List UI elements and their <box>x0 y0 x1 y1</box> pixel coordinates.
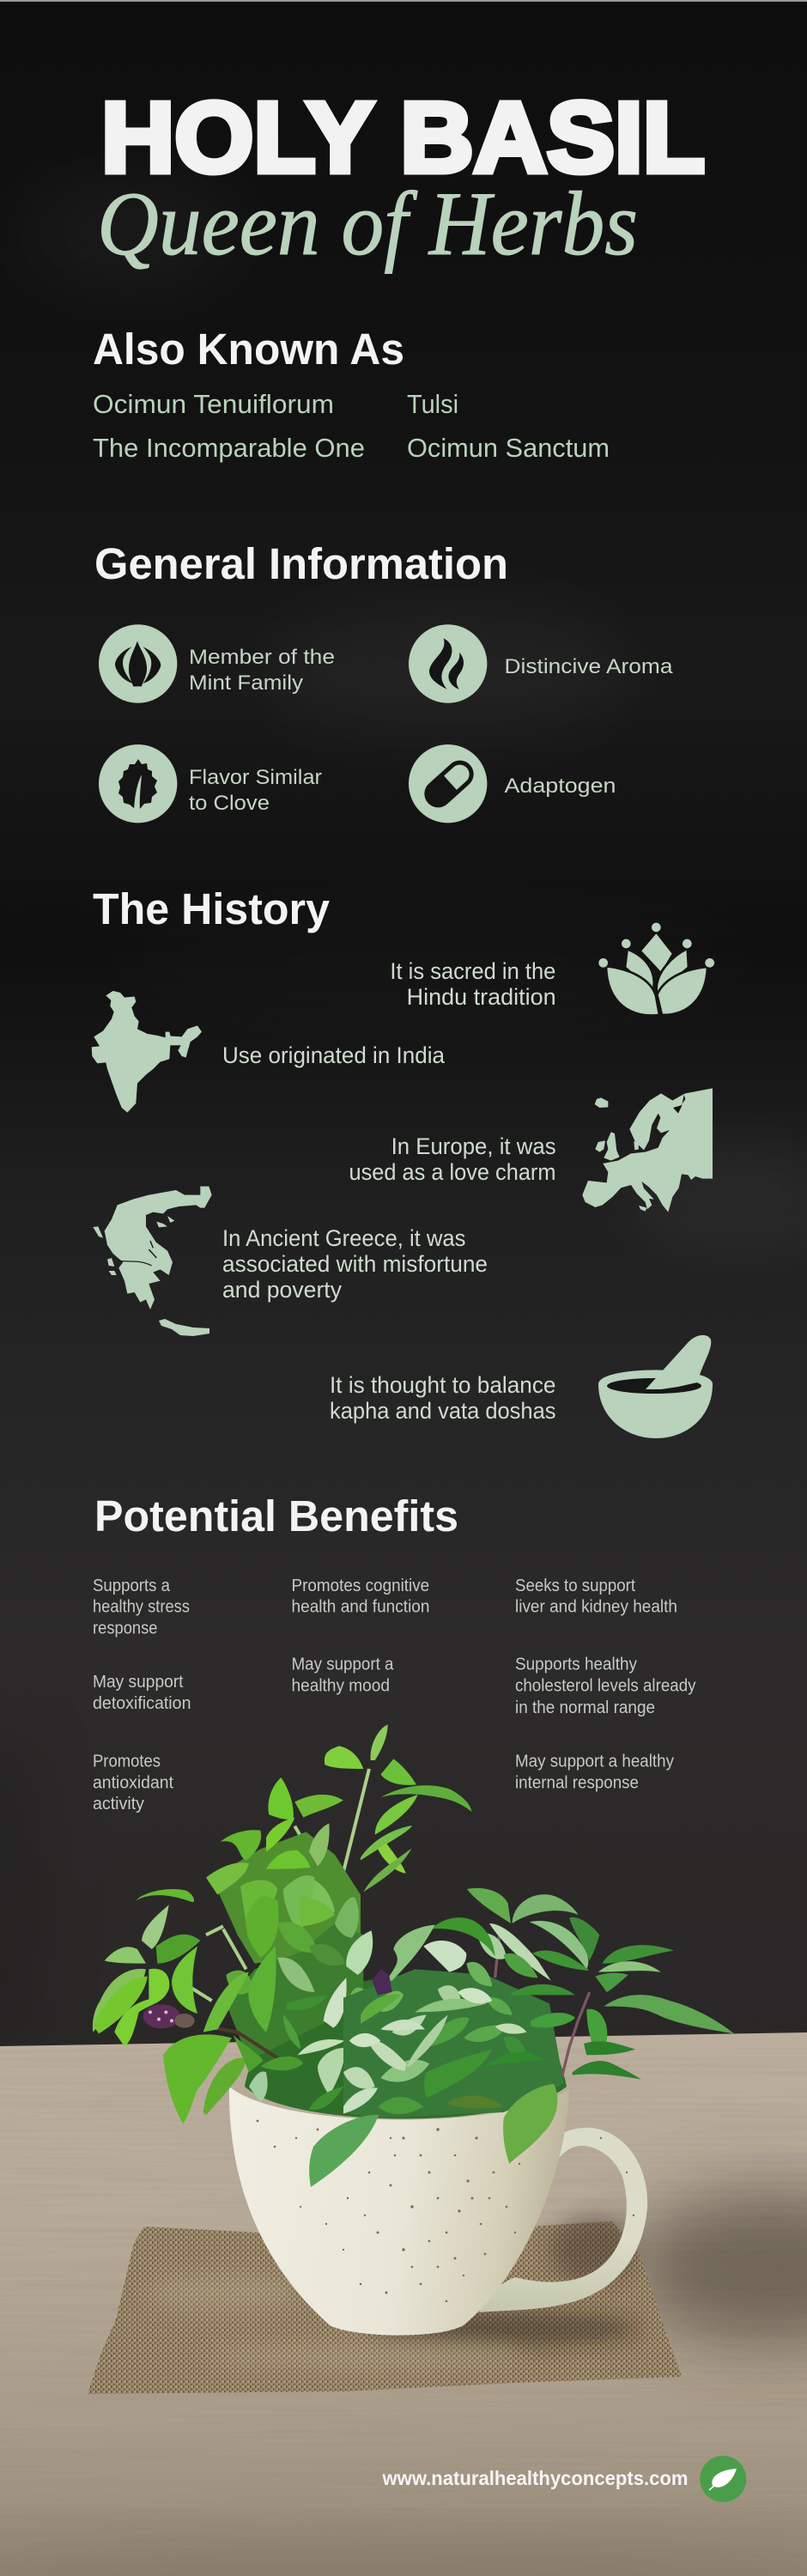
benefit: cholesterol: in the normal range <box>515 1698 655 1717</box>
benefit: liver and kidney: Seeks to support <box>515 1576 635 1595</box>
benefit: cholesterol <box>515 1654 696 1717</box>
title block <box>97 82 705 274</box>
title: Holy Basil: HOLY BASIL <box>101 82 705 193</box>
benefit: liver and kidney: liver and kidney health <box>515 1597 677 1616</box>
text: ancient greece: In Ancient Greece, it was <box>222 1225 465 1251</box>
benefit: healthy mood <box>292 1654 394 1695</box>
benefit: healthy mood: healthy mood <box>292 1676 390 1695</box>
text: use originated in india: Use originated in India <box>222 1042 445 1068</box>
benefit: stress response: response <box>93 1618 158 1638</box>
benefit: stress response: Supports a <box>93 1576 171 1595</box>
website url: www.naturalhealthyconcepts.com <box>382 2467 689 2489</box>
footer <box>382 2456 746 2502</box>
list of alternate names: Tulsi <box>407 389 458 419</box>
benefit: liver and kidney <box>515 1576 677 1616</box>
benefit: stress response: healthy stress <box>93 1597 190 1616</box>
left sprig <box>93 1724 471 2123</box>
benefit: antioxidant activity: Promotes <box>93 1752 161 1771</box>
cup <box>229 2087 647 2336</box>
benefit: internal response: May support a healthy <box>515 1752 675 1771</box>
list of alternate names <box>93 389 610 463</box>
chalkboard background <box>0 0 807 2061</box>
panel: potential benefits <box>93 1492 696 1814</box>
text: member of the mint family <box>189 646 335 695</box>
list of alternate names: The Incomparable One <box>93 433 365 463</box>
cup body <box>229 2087 569 2336</box>
text: ancient greece <box>222 1225 488 1303</box>
benefit: antioxidant activity: antioxidant <box>93 1772 173 1793</box>
benefit: cholesterol: Supports healthy <box>515 1654 638 1674</box>
benefit: cognitive health: health and function <box>292 1597 429 1616</box>
burlap mat <box>88 2215 682 2394</box>
island of crete <box>159 1319 209 1336</box>
icon: aroma flame <box>409 624 487 703</box>
benefit: stress response <box>93 1576 190 1638</box>
icon: green leaf logo <box>700 2456 746 2502</box>
hanging leaf on cup, left <box>309 2115 379 2187</box>
text: ancient greece: and poverty <box>222 1277 343 1303</box>
benefit: antioxidant activity <box>93 1752 173 1814</box>
text: ancient greece: associated with misfortune <box>222 1251 488 1277</box>
benefit: healthy mood: May support a <box>292 1654 394 1674</box>
list of alternate names: Ocimun Sanctum <box>407 433 610 463</box>
text: flavor similar to clove: to Clove <box>189 792 270 815</box>
benefit: internal response: internal response <box>515 1772 639 1793</box>
heading: also known as: Also Known As <box>93 325 404 374</box>
text: sacred in hindu tradition: It is sacred in the <box>390 958 555 984</box>
text: love charm in europe: In Europe, it was <box>391 1133 556 1159</box>
icon: lotus <box>598 923 714 1016</box>
plant: tulsi leaves <box>93 1724 734 2187</box>
plant background foliage <box>245 1974 567 2119</box>
benefit: detoxification: detoxification <box>93 1693 191 1713</box>
text: member of the mint family: Member of the <box>189 646 335 669</box>
flower <box>143 2004 195 2028</box>
panel: also known as <box>93 325 610 463</box>
text: balance doshas: It is thought to balance <box>330 1372 556 1398</box>
benefit: cholesterol: cholesterol levels already <box>515 1676 696 1695</box>
icon: mint bud <box>99 624 177 703</box>
text: sacred in hindu tradition <box>390 958 556 1010</box>
benefit: cognitive health <box>292 1576 429 1616</box>
panel: general information <box>94 539 673 823</box>
table top <box>0 2032 807 2576</box>
hanging leaf on cup, right <box>503 2084 557 2164</box>
text: distinctive aroma: Distincive Aroma <box>505 655 673 678</box>
text: flavor similar to clove: Flavor Similar <box>189 766 322 789</box>
subtitle: Queen of Herbs: Queen of Herbs <box>97 173 638 274</box>
icon: capsule <box>409 744 487 823</box>
text: flavor similar to clove <box>189 766 322 815</box>
icon: serrated leaf <box>99 744 177 823</box>
heading: the history: The History <box>93 884 331 933</box>
text: member of the mint family: Mint Family <box>189 671 304 695</box>
text: love charm in europe: used as a love charm <box>349 1159 556 1185</box>
benefit: detoxification: May support <box>93 1672 184 1692</box>
heading: potential benefits: Potential Benefits <box>94 1492 458 1540</box>
text: love charm in europe <box>349 1133 556 1185</box>
benefit: cognitive health: Promotes cognitive <box>292 1576 429 1595</box>
heading: general information: General Information <box>94 539 508 588</box>
cup handle <box>479 2128 647 2312</box>
benefit: internal response <box>515 1752 675 1793</box>
benefit: antioxidant activity: activity <box>93 1794 145 1814</box>
text: adaptogen: Adaptogen <box>505 775 616 798</box>
text: balance doshas: kapha and vata doshas <box>330 1398 556 1424</box>
speckles <box>257 2120 634 2302</box>
icon: map of india <box>92 991 202 1113</box>
text: balance doshas <box>330 1372 556 1424</box>
icon: map of europe <box>582 1088 713 1212</box>
text: sacred in hindu tradition: Hindu tradition <box>407 984 556 1010</box>
panel: the history <box>92 884 714 1438</box>
list of alternate names: Ocimun Tenuiflorum <box>93 389 334 419</box>
icon: mortar and pestle <box>598 1335 713 1438</box>
icon: map of greece <box>93 1187 212 1336</box>
benefit: detoxification <box>93 1672 191 1713</box>
right sprig <box>343 1888 734 2118</box>
